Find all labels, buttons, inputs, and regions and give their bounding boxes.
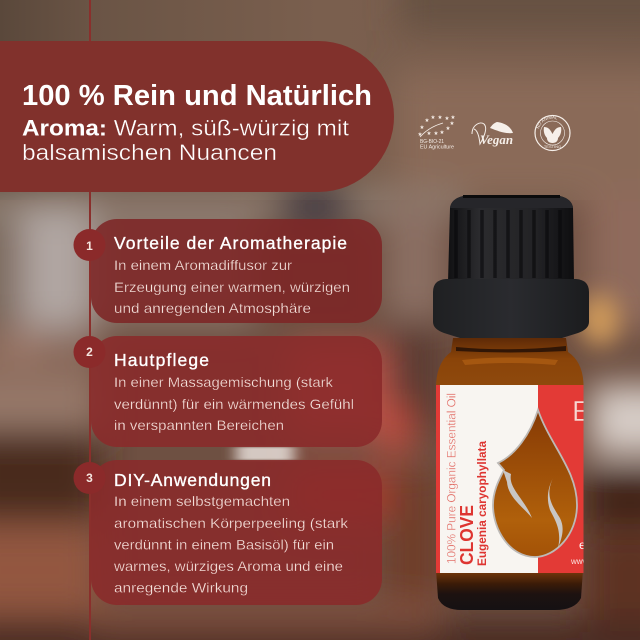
icon: EU organic leaf: ★ — [445, 115, 450, 122]
label: Eugenia caryophyllata — [475, 441, 489, 566]
card 1 text: und anregenden Atmosphäre — [114, 300, 311, 316]
card 1 text — [114, 257, 350, 316]
card 2: Hautpflege — [74, 336, 382, 447]
icon: EU organic leaf: ★ — [425, 117, 430, 124]
icon: vegan — [472, 122, 513, 147]
icon: EU organic leaf: ★ — [450, 120, 455, 127]
icon: no animal testing: TESTING — [544, 144, 561, 149]
card 3 text: verdünnt in einem Basisöl) für ein — [114, 536, 334, 552]
icon: EU organic leaf: ★ — [427, 130, 432, 137]
icon: vegan: Vegan — [480, 132, 513, 147]
number badge 1: 1 — [86, 239, 93, 253]
icon: EU organic leaf: ★ — [418, 131, 423, 138]
number badge 2: 2 — [86, 345, 93, 359]
icon: EU organic leaf: BG-BIO-21 — [420, 139, 444, 145]
icon: EU organic leaf: ★ — [440, 129, 445, 136]
card 1 text: Erzeugung einer warmen, würzigen — [114, 279, 350, 295]
icon: EU organic leaf: ★ — [420, 124, 425, 131]
aroma description: balsamischen Nuancen — [22, 140, 277, 165]
card 2 text: in verspannten Bereichen — [114, 417, 284, 433]
card 1 heading: Vorteile der Aromatherapie — [114, 233, 347, 253]
aroma description: Aroma: Warm, süß-würzig mit — [22, 116, 349, 140]
drop graphic — [493, 410, 577, 557]
icon: no animal testing: NO ANIMAL — [536, 116, 557, 129]
icon: EU organic leaf: EU Agriculture — [420, 144, 454, 150]
label — [436, 385, 591, 573]
card 1 text: In einem Aromadiffusor zur — [114, 257, 292, 273]
glass base — [436, 570, 583, 610]
card 3 text: aromatischen Körperpeeling (stark — [114, 515, 349, 531]
card 2 text: In einer Massagemischung (stark — [114, 374, 334, 390]
bottle — [433, 195, 591, 610]
header banner — [0, 41, 394, 192]
card 3 text: anregende Wirkung — [114, 580, 248, 596]
icon: EU organic leaf: ★ — [438, 114, 443, 121]
title: 100 % Rein und Natürlich — [22, 80, 372, 112]
label: E — [572, 396, 591, 428]
card 2 text — [114, 374, 354, 433]
card 3 text — [113, 493, 349, 596]
card 3 heading: DIY-Anwendungen — [114, 470, 271, 490]
label text: 100% Pure Organic Essential Oil — [446, 393, 458, 564]
icon: EU organic leaf: ★ — [451, 114, 456, 121]
icon: EU organic leaf: ★ — [431, 114, 436, 121]
certification logos — [418, 114, 571, 152]
label: CLOVE — [457, 505, 477, 565]
icon: no animal testing — [534, 114, 571, 152]
icon: EU organic leaf — [418, 114, 456, 150]
label: e — [579, 538, 586, 552]
card 2 text: verdünnt) für ein wärmendes Gefühl — [114, 396, 354, 412]
card 2 heading: Hautpflege — [114, 350, 209, 370]
label: www — [570, 557, 589, 566]
icon: EU organic leaf: ★ — [446, 125, 451, 132]
number badge 3 — [74, 462, 106, 494]
number badge 3: 3 — [86, 471, 93, 485]
card 3: DIY-Anwendungen — [74, 460, 382, 605]
number badge 2 — [74, 336, 106, 368]
icon: EU organic leaf: ★ — [434, 130, 439, 137]
amber glass — [436, 338, 584, 390]
aroma description — [22, 116, 349, 165]
bottle cap — [433, 195, 589, 338]
card 3 text: In einem selbstgemachten — [114, 493, 290, 509]
number badge 1 — [74, 229, 106, 261]
vertical timeline line — [89, 0, 91, 640]
card 3 text: warmes, würziges Aroma und eine — [113, 558, 343, 574]
card 1: Vorteile der Aromatherapie — [74, 219, 382, 323]
